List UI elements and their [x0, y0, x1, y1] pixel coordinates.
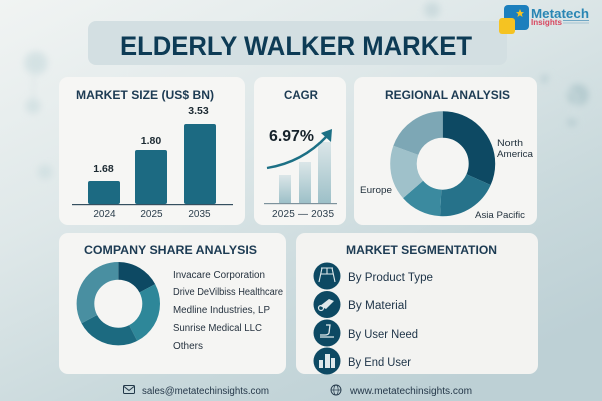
company list: Invacare Corporation [173, 270, 265, 281]
icon: material roll [314, 291, 340, 318]
regional labels [360, 138, 534, 221]
panel: CAGR [254, 77, 346, 225]
company list: Drive DeVilbiss Healthcare [173, 287, 283, 298]
CAGR heading: CAGR [284, 88, 318, 102]
panel: regional analysis [354, 77, 537, 225]
bar chart: 2024 [93, 209, 116, 220]
bar chart [72, 105, 233, 220]
regional labels: Asia Pacific [475, 210, 525, 221]
icon: user need [314, 320, 340, 346]
panel: market segmentation [296, 233, 538, 374]
segmentation labels: By Material [348, 300, 407, 312]
panel: market size [59, 77, 245, 225]
title banner [88, 21, 507, 65]
regional labels: Europe [360, 185, 392, 196]
regional labels: America [497, 149, 534, 160]
company list [173, 270, 283, 352]
CAGR years: 2025 — 2035 [272, 209, 334, 220]
bar chart: 1.68 [93, 163, 114, 175]
segmentation labels: By Product Type [348, 272, 433, 284]
segmentation heading: MARKET SEGMENTATION [346, 243, 497, 257]
company list: Sunrise Medical LLC [173, 323, 262, 334]
bar chart: 2035 [188, 209, 211, 220]
regional donut [403, 124, 482, 203]
panel: company share analysis [59, 233, 286, 374]
segmentation labels: By User Need [348, 329, 418, 341]
company donut [85, 271, 151, 337]
icon: end user buildings [314, 348, 340, 374]
company list: Others [173, 341, 203, 352]
segmentation labels: By End User [348, 357, 411, 369]
regional heading: REGIONAL ANALYSIS [385, 88, 510, 102]
CAGR growth chart [264, 129, 337, 204]
icon: walker [314, 262, 340, 290]
bar chart: 3.53 [188, 105, 209, 117]
bar chart: 1.80 [141, 135, 161, 147]
logo: Metatech [531, 6, 589, 21]
logo [499, 5, 589, 34]
footer: website: www.metatechinsights.com [349, 386, 472, 397]
company heading: COMPANY SHARE ANALYSIS [84, 243, 257, 257]
segmentation labels [348, 272, 433, 369]
logo: Insights [531, 18, 563, 27]
CAGR value: 6.97% [269, 128, 314, 145]
footer: email: sales@metatechinsights.com [142, 386, 269, 397]
company list: Medline Industries, LP [173, 305, 270, 316]
title: ELDERLY WALKER MARKET [120, 31, 472, 61]
regional labels: North [497, 138, 523, 149]
bar chart: 2025 [140, 209, 163, 220]
market size heading: MARKET SIZE (US$ BN) [76, 88, 214, 102]
